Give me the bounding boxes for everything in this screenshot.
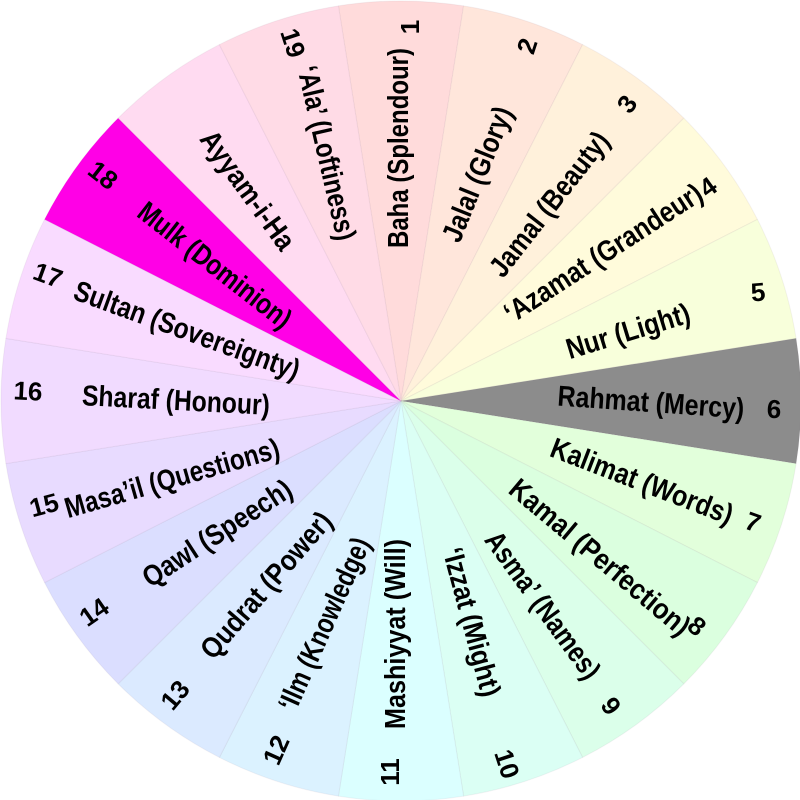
slice 16: Sharaf: 16 xyxy=(13,375,43,407)
slice 15: Masa'il: Masa’il (Questions) xyxy=(61,433,283,525)
slice 1: Baha: Baha (Splendour) xyxy=(383,48,415,248)
slice 9: Asma: 9 xyxy=(595,691,627,721)
slice 13: Qudrat: 13 xyxy=(154,674,196,716)
slice 16: Sharaf: Sharaf (Honour) xyxy=(81,380,271,422)
slice 7: Kalimat xyxy=(401,401,796,583)
slice 15: Masa'il: 15 xyxy=(26,487,62,523)
slice 10: Izzat: 10 xyxy=(488,746,526,782)
slice 18: Mulk (highlighted magenta): 18 xyxy=(82,154,124,196)
slice 3: Jamal: 3 xyxy=(611,89,643,119)
slice 1: Baha: 1 xyxy=(395,20,425,34)
slice 4: Azamat xyxy=(401,118,757,401)
slice 4: Azamat: ‘Azamat (Grandeur) xyxy=(498,178,709,330)
slice 6: Rahmat (highlighted grey): Rahmat (Mercy) xyxy=(557,381,745,425)
slice 12: Ilm xyxy=(219,401,401,796)
slice 2: Jalal: 2 xyxy=(510,34,544,58)
slice 8: Kamal: 8 xyxy=(682,610,712,642)
slice 7: Kalimat: Kalimat (Words) xyxy=(546,432,737,531)
slice 19: Ala: 19 xyxy=(274,25,312,61)
slice 12: Ilm: ‘Ilm (Knowledge) xyxy=(272,533,377,716)
slice 2: Jalal: Jalal (Glory) xyxy=(436,102,520,247)
slice 14: Qawl xyxy=(45,401,401,684)
slice 2: Jalal xyxy=(401,6,583,401)
slice 8: Kamal: Kamal (Perfection) xyxy=(503,473,696,643)
slice 19: Ala xyxy=(219,6,401,401)
slice 10: Izzat xyxy=(401,401,583,796)
slice 13: Qudrat xyxy=(118,401,401,757)
slice 6: Rahmat (highlighted grey): 6 xyxy=(766,394,782,424)
slice 7: Kalimat: 7 xyxy=(741,505,765,539)
slice 16: Sharaf xyxy=(1,338,401,464)
slice 5: Nur: 5 xyxy=(749,276,767,308)
slice 9: Asma xyxy=(401,401,684,757)
slice 18: Mulk (highlighted magenta) xyxy=(45,118,401,401)
slice 1: Baha xyxy=(338,1,464,401)
slice 13: Qudrat: Qudrat (Power) xyxy=(194,506,339,666)
slice 3: Jamal: Jamal (Beauty) xyxy=(483,126,616,283)
slice 11: Mashiyyat: 11 xyxy=(375,758,405,786)
slice 3: Jamal xyxy=(401,45,684,401)
slice 14: Qawl: 14 xyxy=(74,591,115,633)
slice 5: Nur: Nur (Light) xyxy=(562,298,694,366)
slice 11: Mashiyyat: Mashiyyat (Will) xyxy=(380,539,412,729)
slice 14: Qawl: Qawl (Speech) xyxy=(137,474,298,594)
slice 10: Izzat: ‘Izzat (Might) xyxy=(436,544,506,700)
slice 12: Ilm: 12 xyxy=(256,731,296,769)
slice 19: Ala: ‘Ala’ (Loftiness) xyxy=(290,63,362,244)
slice 8: Kamal xyxy=(401,401,757,684)
slice 17: Sultan: 17 xyxy=(29,256,67,294)
slice 17: Sultan xyxy=(6,219,401,401)
slice 15: Masa'il xyxy=(6,401,401,583)
slice: Ayyam-i-Ha xyxy=(118,45,401,401)
slice: Ayyam-i-Ha: Ayyam-i-Ha xyxy=(193,125,302,257)
slice 4: Azamat: 4 xyxy=(693,170,723,203)
slice 5: Nur xyxy=(401,219,796,401)
slice 6: Rahmat (highlighted grey) xyxy=(401,338,800,464)
slice 18: Mulk (highlighted magenta): Mulk (Dominion) xyxy=(131,196,298,336)
slice 9: Asma: Asma’ (Names) xyxy=(478,525,607,686)
slice 11: Mashiyyat xyxy=(338,401,464,800)
slice 17: Sultan: Sultan (Sovereignty) xyxy=(69,275,304,387)
